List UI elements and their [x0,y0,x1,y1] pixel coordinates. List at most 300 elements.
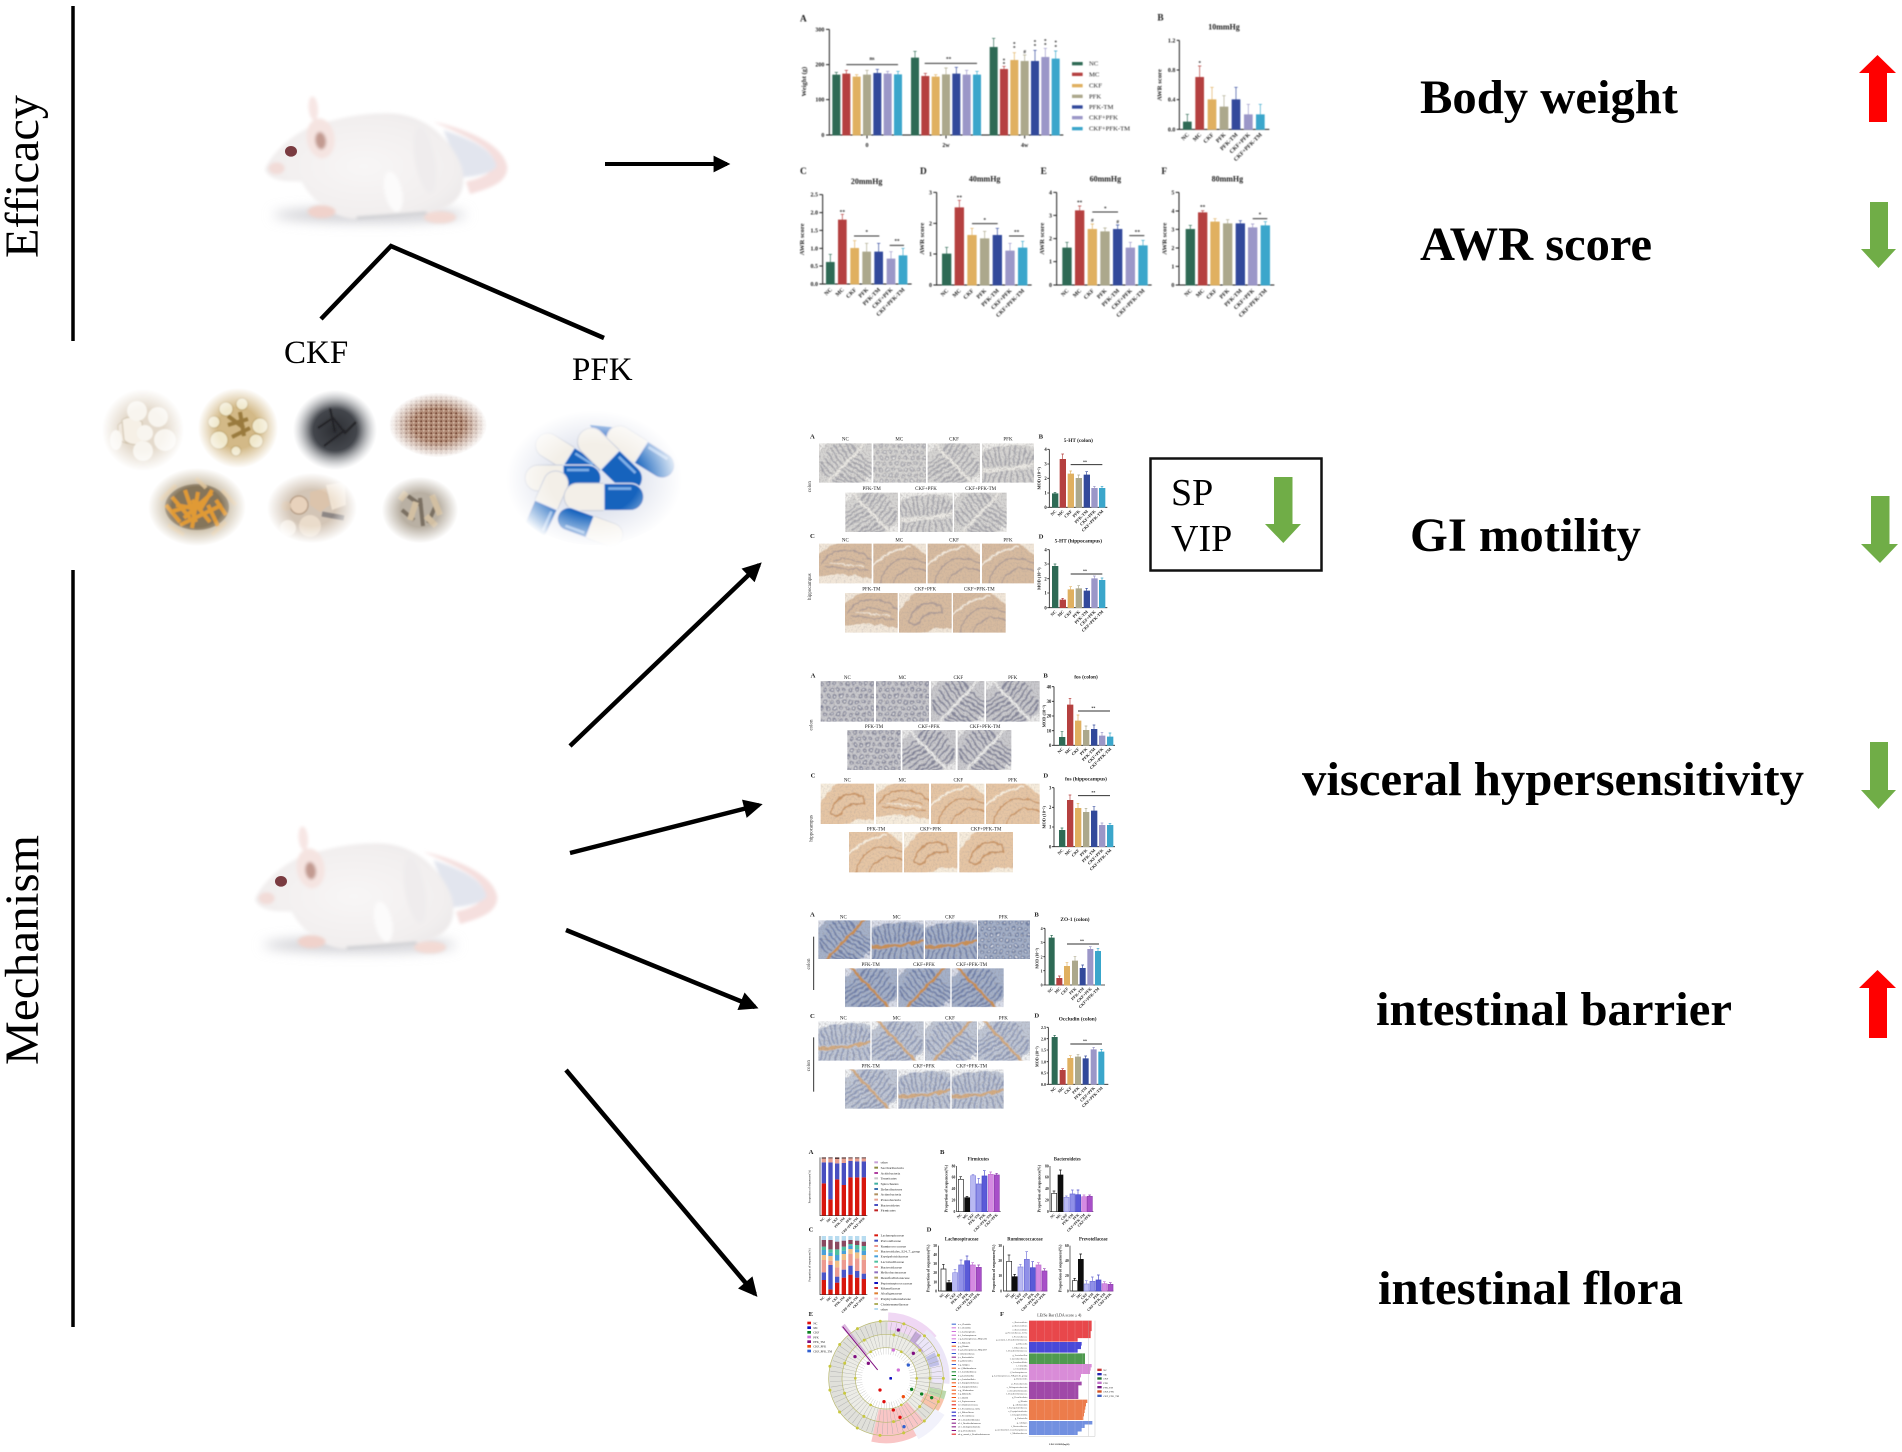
herb: black charred material [294,392,376,468]
chart D: AWR 40mmHg: MC [952,288,963,299]
chart: Occludin colon: 1.0 [1041,1059,1046,1064]
chart: 5-HT hippocampus: PFK [1071,609,1081,619]
cladogram taxa list: u: c_Bacilli [958,1397,968,1399]
micrographs: Occludin colon: CKF [945,1016,955,1021]
panel: fos immunohistochemistry and charts [810,672,1115,876]
cladogram legend: MC [813,1326,818,1330]
chart: Occludin colon: 0.0 [1041,1082,1046,1087]
chart C: AWR 20mmHg: ** [840,209,845,215]
chart: fos colon: ** [1091,705,1095,710]
chart B: Bacteroidetes [1037,1158,1093,1214]
chart: 5-HT colon: 4 [1044,448,1047,453]
arrow: green down [1861,202,1896,268]
micrographs: ZO-1 colon: PFK-TM [862,963,880,968]
chart: 5-HT hippocampus: 1 [1044,592,1047,597]
micrographs: 5-HT hippocampus: CKF+PFK [915,587,937,592]
chart A: phylum stacked bars: A [809,1149,814,1156]
chart D: Ruminococcaceae: 0 [1000,1289,1002,1293]
micrographs: Occludin colon: CKF+PFK [913,1064,935,1069]
chart D: AWR 40mmHg: 40mmHg [969,174,1000,183]
chart: ZO-1 colon: 4 [1041,926,1043,931]
chart F: LEfSe bar: MC [1103,1373,1108,1376]
arrow: to intestinal barrier panel [566,930,755,1007]
cladogram taxa list: y: f_Rikenellaceae [958,1411,974,1414]
chart F: LEfSe bar: g_unclassified_f_Lachnospiraceae [995,1428,1027,1431]
chart C: AWR 20mmHg: * [865,229,868,235]
micrographs: Occludin colon: C [810,1013,815,1020]
chart: Occludin colon: MC [1057,1086,1065,1094]
chart C: family stacked bars: Rikenellaceae [881,1286,901,1290]
chart D: AWR 40mmHg: AWR score [919,223,926,255]
chart D: Ruminococcaceae: 20 [998,1259,1002,1263]
x labels for microbiome bar charts: PFK [1027,1292,1035,1300]
chart: 5-HT colon: CKF [1063,509,1073,519]
chart E: AWR 60mmHg: 3 [1049,213,1052,219]
chart: ZO-1 colon: CKF+PFK-TM [1077,986,1100,1009]
x labels for microbiome bar charts: CKF [967,1212,976,1221]
micrographs: ZO-1 colon: A [810,912,815,919]
chart C: AWR 20mmHg: PFK [858,287,871,299]
callout: SP and VIP decrease: SP [1171,472,1213,514]
chart A: body weight: * [1044,43,1047,49]
chart B: AWR 10mmHg: * [1198,61,1201,67]
label: PFK: PFK [572,352,633,388]
cladogram taxa list: x: f_Prevotellaceae_UCG [958,1407,981,1410]
chart E: AWR 60mmHg: 0 [1049,283,1052,289]
chart A: body weight: 300 [815,27,824,33]
label: CKF: CKF [284,335,348,371]
chart F: LEfSe bar: g_Lachnospiraceae_NK4A136_group [992,1374,1028,1377]
chart C: AWR 20mmHg: 0.0 [811,282,818,288]
chart: Occludin colon: PFK-TM [1073,1085,1088,1101]
callout: SP and VIP decrease [1150,458,1322,570]
chart D: AWR 40mmHg [919,167,1032,319]
chart E: AWR 60mmHg [1039,167,1152,319]
chart: 5-HT hippocampus: 3 [1044,563,1047,568]
chart B: Firmicutes: 80 [952,1164,956,1168]
cladogram taxa list: a1: f_Desulfovibrionaceae [958,1422,981,1425]
arrow: to GI motility panel [570,565,759,746]
chart: fos hippocampus: D [1043,773,1048,780]
chart B: AWR 10mmHg: CKF+PFK [1229,132,1252,155]
chart F: LEfSe bar: g_Rikenella [1016,1343,1027,1346]
chart F: LEfSe bar: f_Rikenellaceae [1012,1346,1027,1349]
chart D: Lachnospiraceae: Lachnospiraceae [945,1238,978,1243]
micrographs: fos hippocampus: MC [898,779,907,784]
chart: fos hippocampus: PFK-TM [1081,848,1096,863]
chart A: body weight: * [1054,40,1057,46]
chart F: LEfSe bar: c_Bacteroidetes [1012,1321,1027,1324]
chart C: family stacked bars: Desulfovibrionaceae [881,1276,910,1280]
x labels for microbiome bar charts: MC [1010,1292,1017,1299]
chart: ZO-1 colon: ZO-1 (colon) [1060,916,1090,923]
micrographs: 5-HT colon: PFK-TM [863,487,881,492]
cladogram taxa list: l: g_Alistipes [958,1363,970,1366]
chart: 5-HT colon: MC [1056,509,1065,517]
micrographs: ZO-1 colon: CKF+PFK-TM [956,963,988,968]
chart: fos hippocampus [1041,773,1115,872]
chart: ZO-1 colon: CKF+PFK [1075,986,1093,1003]
chart: fos colon: CKF+PFK-TM [1089,747,1112,770]
chart: 5-HT hippocampus: CKF+PFK-TM [1081,609,1104,633]
chart D: Ruminococcaceae: Proportion of sequences(%) [991,1244,996,1292]
chart: ZO-1 colon: CKF [1060,986,1070,996]
chart F: LEfSe bar: f_Muribaculaceae [1010,1432,1027,1435]
x labels for microbiome bar charts: CKF [1014,1292,1023,1300]
micrographs: fos colon: A [811,672,816,679]
x labels for microbiome bar charts: NC [819,1295,826,1302]
chart C: AWR 20mmHg: 0.5 [811,264,818,270]
cladogram taxa list: a: o_Clostridia [958,1324,971,1326]
chart F: LEfSe bar: g_Dubosiella [1015,1417,1027,1420]
x labels for microbiome bar charts: PFK [845,1216,853,1224]
micrographs: 5-HT colon: PFK [1003,438,1013,443]
icon: blue and white capsules [520,421,675,540]
chart A: body weight: 100 [815,98,824,104]
chart: 5-HT hippocampus: MOD (10⁻²) [1037,567,1042,590]
micrographs: fos colon: PFK-TM [865,725,884,730]
x labels for microbiome bar charts: CKF+PFK-TM [955,1292,975,1312]
chart C: family stacked bars: Proportion of sequences(%) [808,1248,812,1282]
chart E: AWR 60mmHg: 4 [1049,190,1052,196]
callout: SP and VIP decrease: VIP [1171,518,1232,560]
chart: fos hippocampus: PFK [1079,847,1089,857]
chart C: AWR 20mmHg: AWR score [799,223,806,255]
micrographs: ZO-1 colon: MC [893,915,901,920]
chart F: LEfSe bar: o_Clostridiales [1013,1368,1027,1371]
branch lines from mouse to CKF and PFK [321,246,604,338]
cladogram taxa list: d: f_Lachnospiraceae [958,1334,977,1337]
chart: ZO-1 colon: 0 [1041,983,1043,988]
chart C: AWR 20mmHg: CKF [845,287,858,300]
chart D: Ruminococcaceae: Ruminococcaceae [1007,1238,1043,1243]
chart B: Bacteroidetes: 20 [1045,1198,1049,1202]
chart: 5-HT colon: B [1039,433,1044,440]
icon: white mouse (efficacy) [265,96,507,223]
chart D: Prevotellaceae: 0 [1067,1289,1069,1293]
chart E: AWR 60mmHg: 60mmHg [1090,174,1121,183]
chart A: body weight: ns [869,56,875,62]
chart F: LEfSe bar: CKF_PFK [1103,1391,1114,1394]
arrow: to intestinal flora panel [566,1070,755,1294]
chart A: phylum stacked bars [808,1149,904,1216]
chart: 5-HT colon: ** [1083,459,1087,464]
chart: fos colon: MC [1064,747,1072,755]
chart D: Lachnospiraceae: 40 [933,1253,937,1257]
x labels for microbiome bar charts: CKF [1060,1212,1069,1221]
micrographs: 5-HT hippocampus: CKF+PFK-TM [964,587,995,592]
chart: fos colon: PFK-TM [1081,747,1096,762]
chart: 5-HT colon: CKF+PFK-TM [1081,509,1104,533]
chart F: LEfSe bar: o_Bacteroidales [1012,1328,1027,1331]
chart D: Ruminococcaceae: 10 [998,1274,1002,1278]
chart D: AWR 40mmHg: * [983,217,986,223]
chart F: AWR 80mmHg: PFK [1219,288,1231,300]
chart: 5-HT hippocampus: PFK-TM [1073,609,1089,625]
cladogram taxa list: z: f_Prevotellaceae [958,1415,975,1418]
x labels for microbiome bar charts: MC [962,1213,969,1220]
cladogram rings [799,1291,973,1452]
chart: 5-HT colon: MOD (10⁻²) [1037,467,1042,490]
chart: ZO-1 colon: ** [1080,939,1084,944]
micrographs: fos hippocampus: CKF [953,779,963,784]
chart E: AWR 60mmHg: 1 [1049,260,1052,266]
chart E: AWR 60mmHg: * [1104,206,1107,212]
cladogram taxa list: a2: c_Deltaproteobacteria [958,1427,980,1429]
micrographs: fos colon: CKF [953,676,963,681]
chart F: LEfSe bar: c_Deltaproteobacteria [1007,1386,1027,1389]
chart: 5-HT hippocampus: 4 [1044,548,1047,553]
chart A: body weight: CKF+PFK-TM [1089,126,1130,133]
chart F: LEfSe bar: g_Desulfovibrio [1012,1396,1028,1399]
chart A: phylum stacked bars: Proportion of sequences(%) [808,1170,812,1203]
chart C: family stacked bars: Prevotellaceae [881,1239,901,1243]
chart C: family stacked bars: other [881,1307,889,1311]
chart F: LEfSe bar: F [1000,1311,1004,1318]
chart F: LEfSe bar: f_Desulfovibrionaceae [1006,1350,1027,1353]
cladogram taxa list: o: g_Lactobacillus [958,1374,974,1377]
arrow: green down [1861,742,1896,809]
chart F: LEfSe bar: g_Prevotellaceae_UCG [1005,1332,1028,1335]
chart A: body weight: A [800,15,807,25]
chart B: AWR 10mmHg: 0.0 [1168,127,1175,133]
micrographs: Occludin colon: colon [807,1060,812,1071]
x labels for microbiome bar charts: CKF+PFK [852,1216,866,1230]
chart: Occludin colon: D [1034,1013,1039,1020]
herb: sliced root [197,387,279,469]
chart E: LEfSe cladogram [799,1291,973,1452]
chart: ZO-1 colon: 2 [1041,954,1043,959]
chart: 5-HT hippocampus: 0 [1044,606,1047,611]
chart: 5-HT colon: PFK [1071,508,1081,518]
micrographs: fos hippocampus: CKF+PFK [920,827,942,832]
chart E: LEfSe cladogram: E [809,1311,814,1318]
x labels for microbiome bar charts: MC [826,1216,833,1223]
x labels for microbiome bar charts [819,1212,1112,1314]
chart: fos colon: PFK [1079,746,1089,756]
chart D: Prevotellaceae: 40 [1065,1259,1069,1263]
x labels for microbiome bar charts: CKF [1080,1292,1089,1300]
chart F: AWR 80mmHg [1161,167,1274,319]
cladogram taxa list: m: f_Muribaculaceae [958,1367,976,1370]
chart F: AWR 80mmHg: AWR score [1162,223,1169,255]
chart A: body weight: 4w [1021,143,1029,149]
chart: 5-HT hippocampus [1037,533,1107,633]
x labels for microbiome bar charts: CKF [831,1296,839,1303]
chart C: family stacked bars: Helicobacteraceae [881,1271,907,1275]
chart F: LEfSe bar: o_Erysipelotrichales [1008,1410,1027,1413]
micrographs: 5-HT colon: CKF+PFK [915,487,937,492]
chart F: LEfSe bar: PFK_TM [1103,1386,1114,1389]
chart A: body weight: * [1003,61,1006,67]
herb: white slices [105,392,181,468]
chart F: LEfSe bar: g_Alistipes [1017,1421,1027,1424]
chart: 5-HT hippocampus: 2 [1044,577,1047,582]
chart F: AWR 80mmHg: CKF+PFK [1233,288,1256,311]
chart F: AWR 80mmHg: F [1161,167,1167,177]
x labels for microbiome bar charts: NC [1049,1213,1056,1219]
label: visceral hypersensitivity: visceral hypersensitivity [1302,753,1804,806]
cladogram taxa list: k: g_Bacteroides [958,1360,973,1363]
chart: fos colon: fos (colon) [1074,674,1098,681]
chart D: AWR 40mmHg: NC [940,288,950,298]
chart: Occludin colon: MOD (10⁻²) [1034,1046,1039,1067]
chart B: Firmicutes [940,1149,1001,1214]
chart: fos hippocampus: NC [1056,848,1064,856]
chart D: AWR 40mmHg: ** [1014,229,1020,235]
chart B: Bacteroidetes: Bacteroidetes [1054,1158,1081,1163]
chart: fos hippocampus: 2 [1049,806,1052,811]
chart A: body weight [800,15,1130,149]
chart: fos hippocampus: 0 [1049,845,1052,850]
chart A: body weight: 0 [821,133,824,139]
chart D: AWR 40mmHg: 2 [929,221,932,227]
arrow: to efficacy charts [605,162,727,166]
chart A: phylum stacked bars: Firmicutes [881,1209,896,1213]
micrographs: 5-HT hippocampus: NC [842,538,849,543]
chart D: AWR 40mmHg: PFK-TM [981,288,1001,308]
chart F: LEfSe bar: g_Blautia [1018,1400,1027,1403]
chart C: AWR 20mmHg: 2.0 [811,211,818,217]
x labels for microbiome bar charts: PFK-TM [834,1295,846,1308]
chart E: AWR 60mmHg: MC [1072,288,1083,299]
chart A: body weight: * [1013,45,1016,51]
chart F: AWR 80mmHg: ** [1200,204,1206,210]
chart: fos hippocampus: fos (hippocampus) [1065,776,1107,783]
x labels for microbiome bar charts: PFK-TM [950,1292,963,1305]
chart D: Lachnospiraceae: 20 [933,1271,937,1275]
cladogram legend: NC [813,1321,817,1325]
chart B: Firmicutes: 20 [952,1198,956,1202]
chart: Occludin colon: PFK [1071,1085,1081,1095]
chart F: AWR 80mmHg: CKF [1206,288,1219,301]
x labels for microbiome bar charts: CKF+PFK [1077,1213,1092,1228]
chart E: AWR 60mmHg: CKF [1083,288,1096,301]
chart F: LEfSe bar: g_norank_f_Desulfovibrionaceae [996,1339,1027,1342]
herb images group [101,387,488,547]
chart A: body weight: PFK [1089,93,1101,100]
chart F: AWR 80mmHg: PFK-TM [1224,288,1244,308]
chart B: AWR 10mmHg: CKF+PFK-TM [1233,132,1264,163]
chart B: AWR 10mmHg: 10mmHg [1208,22,1240,31]
micrographs: ZO-1 colon: CKF [945,915,955,920]
micrographs: 5-HT colon: CKF+PFK-TM [965,487,997,492]
chart C: family stacked bars: Alcaligenaceae [881,1292,902,1296]
chart C: AWR 20mmHg: NC [824,287,834,297]
chart D: AWR 40mmHg: ** [957,195,962,201]
chart D: AWR 40mmHg: CKF [963,288,976,301]
x labels for microbiome bar charts: CKF+PFK-TM [1066,1213,1086,1233]
chart: 5-HT colon: 2 [1044,477,1047,482]
chart: fos hippocampus: MC [1064,848,1072,856]
chart E: AWR 60mmHg: ** [1135,229,1140,235]
chart F: LEfSe bar: CKF [1103,1378,1109,1381]
chart: 5-HT hippocampus: ** [1083,569,1087,574]
cladogram taxa list: b: c_Clostridia [958,1328,971,1330]
micrographs: ZO-1 colon: PFK [999,915,1008,920]
mechanism divider line [71,570,75,1327]
chart D: AWR 40mmHg: CKF+PFK-TM [995,288,1027,319]
chart D: AWR 40mmHg: CKF+PFK [990,288,1014,311]
chart A: body weight: * [1034,43,1037,49]
chart: Occludin colon: ** [1083,1039,1087,1044]
herb: orange strips [150,470,244,544]
micrographs: Occludin colon [807,1013,1033,1112]
chart D: Prevotellaceae: Prevotellaceae [1079,1238,1108,1243]
chart F: LEfSe bar: p_Proteobacteria [1012,1382,1027,1385]
chart C: AWR 20mmHg: 20mmHg [851,177,882,186]
panel: efficacy bar charts [799,14,1274,319]
x labels for microbiome bar charts: NC [939,1292,946,1299]
chart F: LEfSe bar: g_Bacteroides [1014,1378,1027,1381]
cladogram taxa list: c: o_Lachnospirales [958,1331,975,1333]
chart: 5-HT hippocampus: CKF+PFK [1079,609,1097,627]
micrographs: fos hippocampus: NC [844,779,851,784]
chart D: Lachnospiraceae: 50 [933,1244,937,1248]
chart C: AWR 20mmHg: 1.5 [811,228,818,234]
chart: 5-HT colon [1037,433,1107,533]
micrographs: fos hippocampus: CKF+PFK-TM [971,827,1002,832]
micrographs: 5-HT colon: NC [842,438,849,443]
chart D: Prevotellaceae: Proportion of sequences(%) [1058,1244,1063,1292]
chart B: AWR 10mmHg: 0.8 [1168,68,1175,74]
chart: Occludin colon: 0.5 [1041,1071,1046,1076]
chart D: Lachnospiraceae: D [927,1227,932,1234]
cladogram taxa list: v: f_Peptococcaceae [958,1400,976,1403]
chart: fos colon: 10 [1047,729,1052,734]
chart A: phylum stacked bars: Bacteroidetes [881,1203,900,1207]
cladogram taxa list: a3: p_Proteobacteria [958,1430,976,1432]
chart C: AWR 20mmHg: 2.5 [811,193,818,199]
micrographs: fos hippocampus: C [811,773,816,780]
micrographs: fos colon: colon [810,719,815,731]
arrow: green down [1861,496,1898,563]
chart E: AWR 60mmHg: ** [1077,200,1083,206]
cladogram legend: CKF [813,1331,819,1335]
x labels for microbiome bar charts: NC [1070,1292,1077,1299]
chart: Occludin colon: CKF [1063,1085,1073,1095]
panel: intestinal flora [799,1149,1120,1452]
micrographs: 5-HT hippocampus: C [810,533,815,540]
chart F: AWR 80mmHg: NC [1184,288,1194,298]
chart: 5-HT hippocampus: NC [1049,609,1057,617]
chart: fos hippocampus: CKF [1070,848,1081,858]
chart F: AWR 80mmHg: 2 [1171,246,1174,252]
chart A: body weight: ** [946,57,952,63]
micrographs: 5-HT colon [808,433,1037,535]
x labels for microbiome bar charts: CKF+PFK [966,1292,981,1307]
chart B: AWR 10mmHg: 0.4 [1168,98,1175,104]
x labels for microbiome bar charts: PFK [1072,1213,1080,1221]
micrographs: fos colon: CKF+PFK-TM [970,725,1001,730]
micrographs: 5-HT colon: A [810,433,815,440]
chart B: AWR 10mmHg: 1.2 [1168,38,1175,44]
x labels for microbiome bar charts: MC [1076,1292,1083,1299]
chart: 5-HT hippocampus: 5-HT (hippocampus) [1055,538,1102,545]
chart F: LEfSe bar: c_Erysipelotrichia [1010,1413,1027,1416]
chart A: body weight: 0 [865,143,868,149]
chart: ZO-1 colon: PFK-TM [1070,986,1085,1001]
chart C: AWR 20mmHg [799,167,912,318]
x labels for microbiome bar charts: CKF+PFK [852,1295,866,1309]
x labels for microbiome bar charts: CKF+PFK-TM [973,1213,993,1233]
chart F: AWR 80mmHg: 3 [1171,227,1174,233]
chart: ZO-1 colon: NC [1046,986,1054,994]
chart C: family stacked bars: C [809,1227,814,1234]
chart A: body weight: NC [1089,61,1099,68]
chart B: Firmicutes: Firmicutes [968,1158,989,1163]
chart C: AWR 20mmHg: C [800,167,807,177]
